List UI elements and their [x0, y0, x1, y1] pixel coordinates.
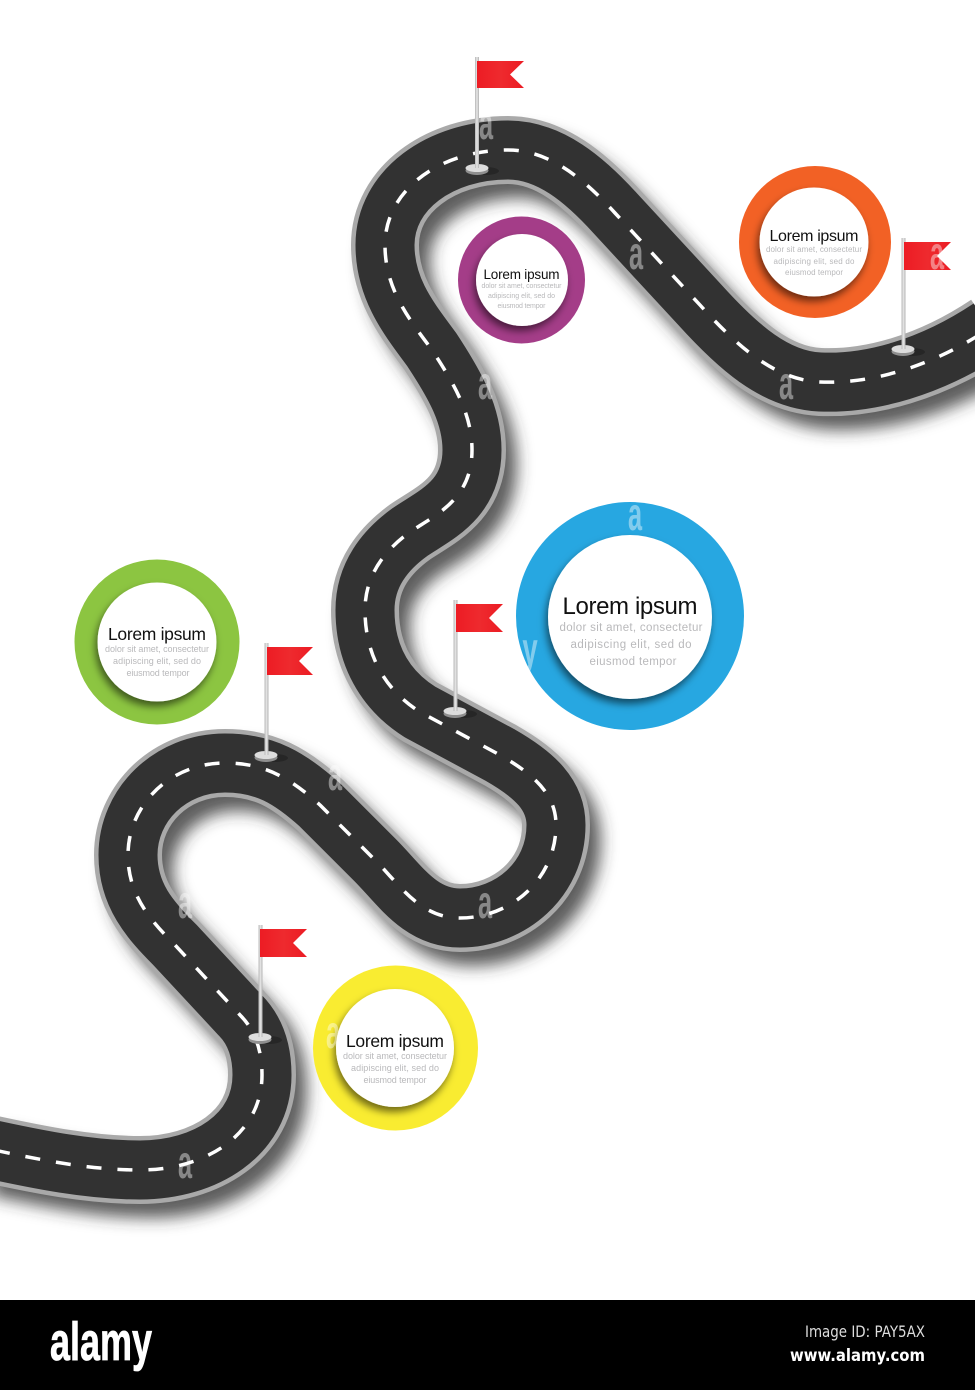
circle: orange: dolor sit amet, consectetur: [766, 245, 862, 254]
road: [0, 150, 975, 1185]
circle: blue: [516, 502, 744, 730]
road centre line: [0, 150, 975, 1170]
circle: purple: eiusmod tempor: [498, 303, 546, 310]
watermark letters: a: [629, 227, 643, 279]
watermark letters: a: [478, 357, 492, 409]
circle: orange: Lorem ipsum: [770, 228, 858, 245]
watermark letters: a: [479, 97, 493, 149]
circle: blue: Lorem ipsum: [562, 593, 698, 620]
footer image id: Image ID: PAY5AX: [805, 1322, 925, 1341]
footer bar: [0, 1300, 975, 1390]
watermark letters: y: [522, 625, 538, 676]
footer url: www.alamy.com: [790, 1346, 925, 1366]
circle: yellow: dolor sit amet, consectetur: [343, 1051, 447, 1061]
watermark letters: a: [328, 748, 342, 800]
circle: orange: eiusmod tempor: [785, 268, 843, 277]
watermark letters: [178, 97, 944, 1188]
road edge: [0, 150, 975, 1170]
circle: green: Lorem ipsum: [108, 624, 206, 644]
footer logo: alamy: [50, 1312, 152, 1372]
circle: purple: adipiscing elit, sed do: [488, 293, 555, 300]
watermark letters: a: [326, 1006, 340, 1058]
flag: right: [892, 238, 951, 356]
circle: yellow: [313, 966, 478, 1130]
circle: yellow: eiusmod tempor: [364, 1075, 426, 1085]
circle: purple: [458, 216, 585, 344]
circle: orange: adipiscing elit, sed do: [774, 257, 855, 266]
watermark letters: a: [178, 1136, 192, 1188]
circle: green: adipiscing elit, sed do: [113, 656, 201, 666]
road asphalt: [0, 150, 975, 1170]
flag: bottom: [248, 925, 307, 1044]
circle: blue: eiusmod tempor: [590, 656, 677, 668]
watermark letters: a: [779, 357, 793, 409]
circle: purple: Lorem ipsum: [484, 267, 560, 282]
circle: blue: adipiscing elit, sed do: [570, 639, 692, 651]
watermark letters: a: [478, 876, 492, 928]
flag: centre: [444, 600, 503, 718]
flag: top: [466, 57, 524, 175]
circle: green: [74, 560, 240, 724]
watermark letters: a: [930, 227, 944, 279]
road shadow: [0, 165, 975, 1185]
watermark letters: a: [178, 876, 192, 928]
circle: green: dolor sit amet, consectetur: [105, 644, 209, 654]
circle: orange: [739, 166, 891, 318]
circle: yellow: adipiscing elit, sed do: [351, 1063, 439, 1073]
circle: blue: dolor sit amet, consectetur: [560, 622, 703, 634]
flag: left: [254, 643, 313, 762]
circle: purple: dolor sit amet, consectetur: [482, 283, 562, 290]
circle: yellow: Lorem ipsum: [346, 1031, 444, 1051]
circle: green: eiusmod tempor: [126, 668, 190, 678]
watermark letters: a: [628, 488, 642, 540]
